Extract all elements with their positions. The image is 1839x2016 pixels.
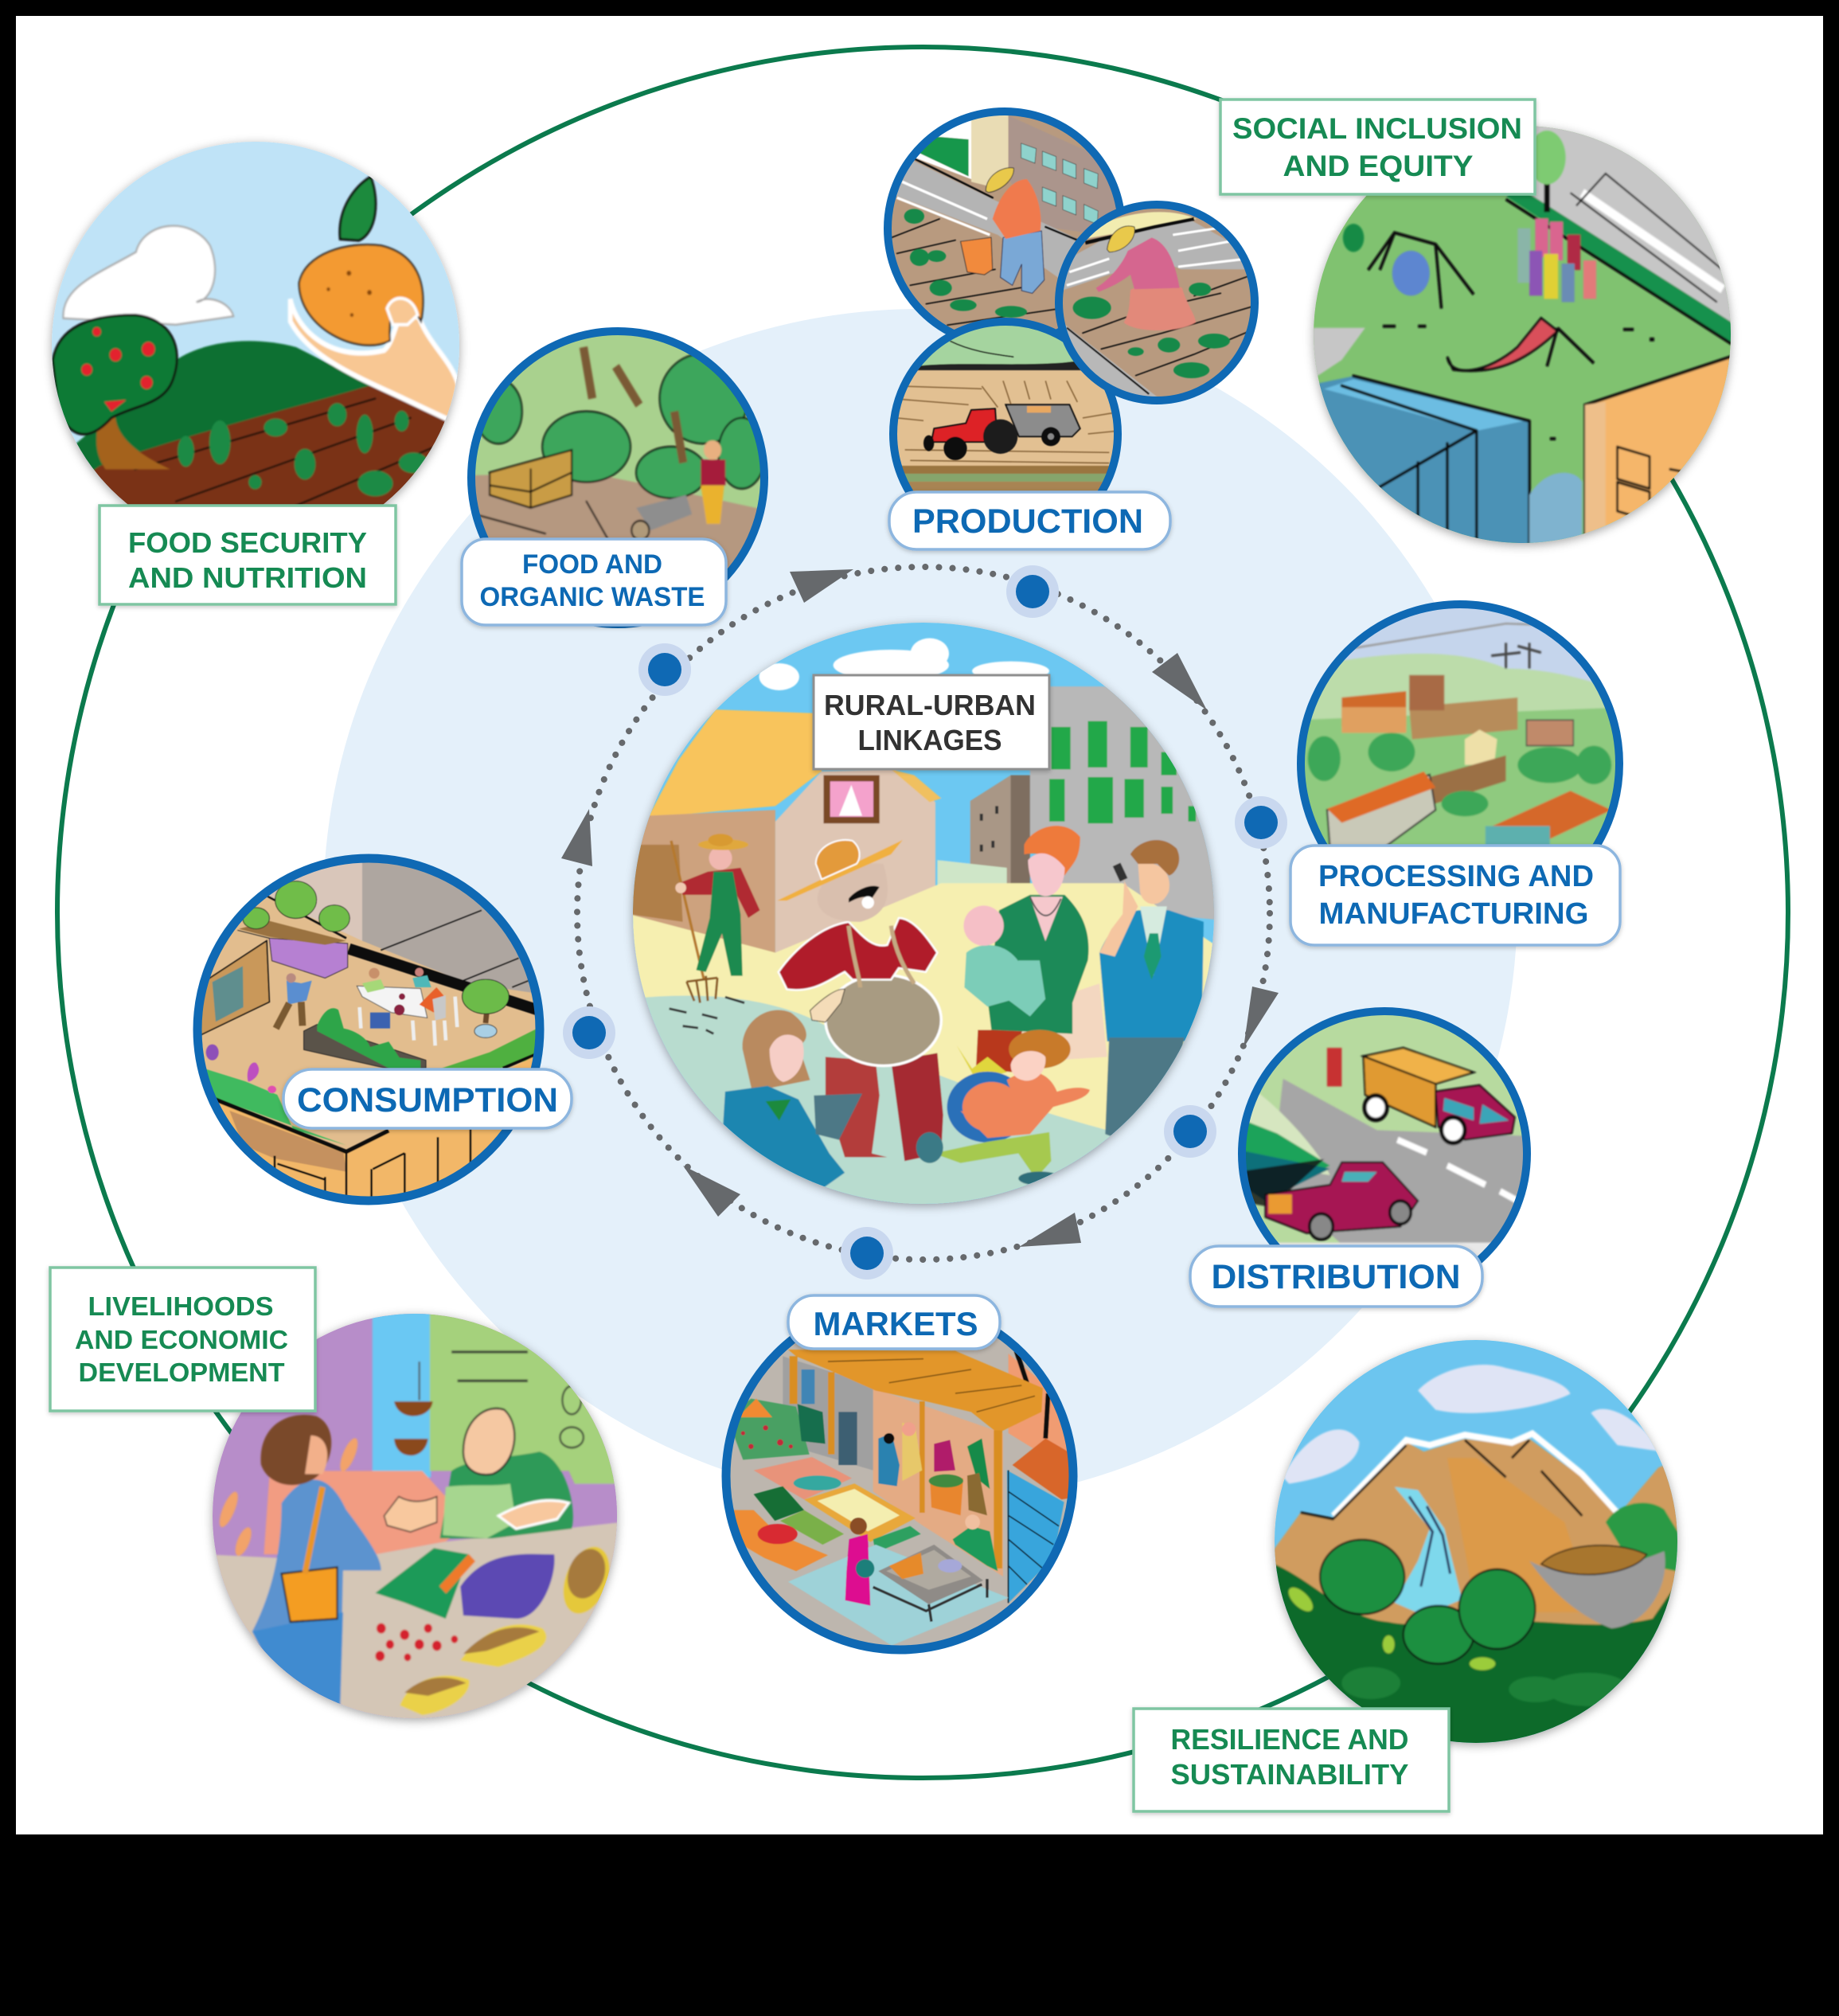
label: distribution <box>1190 1246 1482 1307</box>
pale blue disc <box>323 309 1517 1503</box>
label: social inclusion <box>1220 100 1535 194</box>
illustration: playground between buildings <box>1306 115 1740 559</box>
label: rural-urban linkages: LINKAGES <box>858 724 1001 756</box>
panel: livelihoods and economic development <box>50 1268 622 1734</box>
label: resilience: RESILIENCE AND <box>1170 1723 1409 1756</box>
label: livelihoods: DEVELOPMENT <box>78 1358 285 1387</box>
label: rural-urban linkages <box>814 675 1049 769</box>
label: processing and manufacturing <box>1290 846 1620 945</box>
illustration: woman tending plants <box>1051 205 1260 408</box>
illustration: mountains, waterfall and forest <box>1266 1365 1688 1760</box>
label: production: PRODUCTION <box>912 502 1143 541</box>
panel: resilience and sustainability <box>1134 1340 1688 1811</box>
illustration: shopper and vendor at stall <box>205 1303 622 1734</box>
label: food and organic waste <box>462 539 726 625</box>
label: consumption: CONSUMPTION <box>297 1081 558 1119</box>
label: food security <box>100 506 396 604</box>
dotted cycle ring <box>577 567 1270 1260</box>
illustration: compost crate and gardener <box>475 346 760 568</box>
panel: markets <box>726 1295 1077 1650</box>
label: social inclusion: AND EQUITY <box>1283 150 1474 182</box>
label: livelihoods: LIVELIHOODS <box>88 1291 274 1321</box>
label: resilience <box>1134 1709 1449 1811</box>
cycle nodes <box>563 565 1287 1280</box>
illustration: tractor in field <box>889 318 1122 493</box>
label: food and organic waste: ORGANIC WASTE <box>479 582 705 612</box>
illustration: rooftop terrace dining <box>202 863 535 1196</box>
panel: consumption <box>197 858 572 1220</box>
panel: food security and nutrition <box>47 142 469 604</box>
label: livelihoods <box>50 1268 315 1411</box>
label: resilience: SUSTAINABILITY <box>1170 1758 1409 1791</box>
illustration: agro-processing landscape <box>1305 621 1615 844</box>
illustration: busy market stalls <box>727 1350 1077 1646</box>
label: distribution: DISTRIBUTION <box>1212 1258 1460 1296</box>
cycle arrows <box>561 569 1279 1247</box>
label: markets <box>788 1295 1000 1349</box>
label: rural-urban linkages: RURAL-URBAN <box>824 689 1036 721</box>
label: consumption <box>283 1069 572 1128</box>
label: food and organic waste: FOOD AND <box>522 549 662 580</box>
illustration: truck and pickup on road <box>1246 1045 1523 1256</box>
label: markets: MARKETS <box>814 1305 978 1342</box>
illustration: rural and urban people <box>629 639 1239 1231</box>
label: production <box>889 492 1170 549</box>
panel: food and organic waste <box>458 331 786 643</box>
illustration: urban gardener <box>888 107 1122 346</box>
label: livelihoods: AND ECONOMIC <box>75 1325 288 1354</box>
panel: distribution <box>1190 1011 1541 1307</box>
label: processing and manufacturing: PROCESSING AND <box>1318 860 1594 893</box>
panel: rural-urban linkages centre <box>629 623 1239 1231</box>
label: food security: AND NUTRITION <box>128 561 367 594</box>
illustration: orange in hand above field <box>52 175 457 505</box>
label: social inclusion: SOCIAL INCLUSION <box>1232 112 1522 145</box>
label: processing and manufacturing: MANUFACTURING <box>1318 897 1589 931</box>
panel: processing and manufacturing <box>1290 604 1629 945</box>
panel: production <box>886 107 1260 549</box>
label: food security: FOOD SECURITY <box>128 526 367 559</box>
panel: social inclusion and equity <box>1220 100 1740 559</box>
